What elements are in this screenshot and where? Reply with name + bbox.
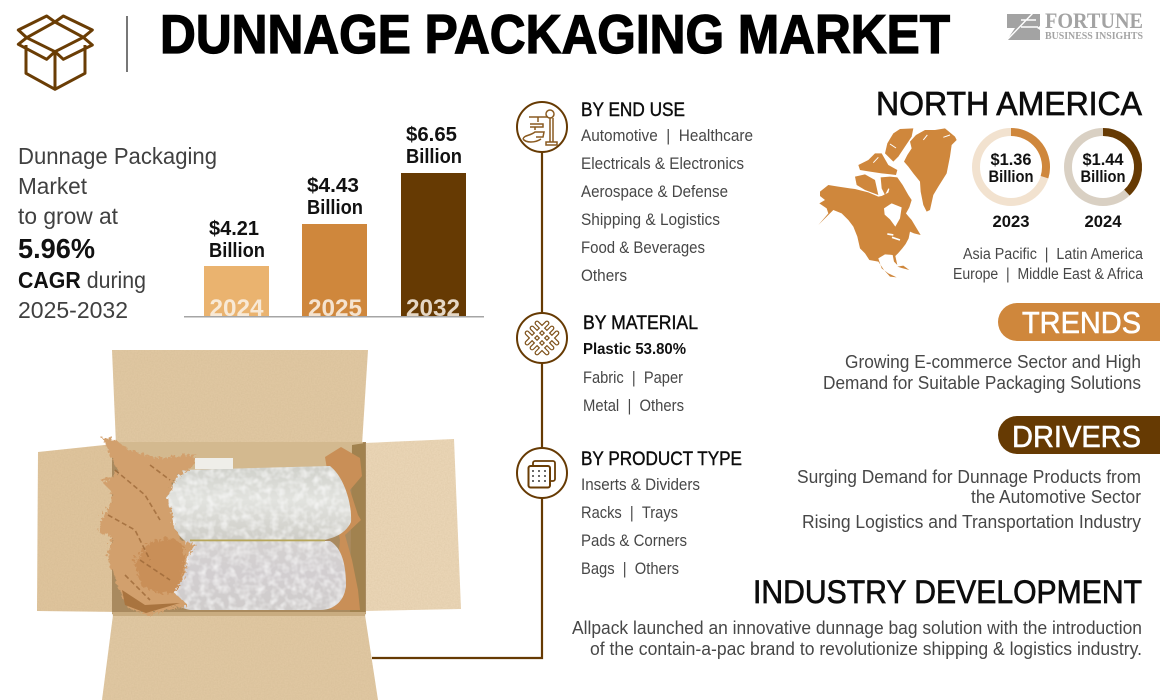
- bar 2024: $4.21: [209, 218, 259, 240]
- icon: product type: [517, 448, 567, 498]
- donut: 2023: $1.36: [990, 150, 1032, 169]
- donut: 2024: 2024: [1084, 212, 1122, 231]
- bar 2025: 2025: [308, 295, 362, 322]
- donut: 2023: 2023: [992, 212, 1030, 231]
- pill: drivers: DRIVERS: [1012, 419, 1141, 454]
- bar chart: market size: [184, 124, 484, 322]
- bar 2024: [204, 218, 269, 322]
- CAGR text block: CAGR during: [18, 267, 146, 293]
- segment: by material: Fabric | Paper: [583, 369, 683, 387]
- heading: industry development: INDUSTRY DEVELOPMENT: [753, 574, 1142, 610]
- donut: 2023: Billion: [988, 167, 1034, 186]
- segment: by product type: Racks | Trays: [581, 504, 678, 522]
- segment: by product type: Pads & Corners: [581, 532, 687, 550]
- icon: open cardboard box: [18, 16, 92, 89]
- heading: north america: NORTH AMERICA: [876, 85, 1142, 122]
- CAGR text block: 2025-2032: [18, 297, 128, 323]
- segment: by end use: Shipping & Logistics: [581, 211, 720, 229]
- icon: end use: [517, 102, 567, 152]
- segment: by product type: [581, 449, 742, 578]
- segment: by product type: BY PRODUCT TYPE: [581, 449, 742, 470]
- other regions: Asia Pacific | Latin America: [963, 246, 1143, 263]
- logo: Fortune Business Insights: [1006, 8, 1143, 42]
- bar 2032: $6.65: [406, 124, 457, 146]
- segment: by end use: Food & Beverages: [581, 239, 705, 257]
- bar 2024: 2024: [210, 295, 264, 322]
- CAGR text block: to grow at: [18, 203, 119, 229]
- bubble wrap top: [165, 466, 351, 541]
- CAGR text block: [18, 143, 217, 323]
- bubble wrap bottom: [171, 541, 346, 610]
- title: DUNNAGE PACKAGING MARKET: [160, 3, 950, 65]
- segment: by end use: BY END USE: [581, 100, 685, 121]
- text: trends: Growing E-commerce Sector and High: [845, 352, 1141, 372]
- CAGR text block: Dunnage Packaging: [18, 143, 217, 169]
- segment: by end use: Automotive | Healthcare: [581, 127, 753, 145]
- map: north america: [818, 128, 957, 277]
- segment: by product type: Bags | Others: [581, 560, 679, 578]
- text: drivers: [797, 467, 1141, 532]
- bar 2025: [302, 175, 367, 322]
- text: drivers: the Automotive Sector: [971, 487, 1141, 507]
- text: industry development: [572, 618, 1142, 659]
- segment: by material: BY MATERIAL: [583, 313, 698, 334]
- bar 2032: [401, 124, 466, 322]
- kraft paper left: [97, 436, 195, 613]
- donut: 2024: $1.44: [1082, 150, 1124, 169]
- segment: by material: Plastic 53.80%: [583, 341, 686, 358]
- kraft paper creases: [108, 465, 170, 600]
- other regions: [953, 246, 1143, 283]
- donut: 2024: Billion: [1080, 167, 1126, 186]
- text: industry development: of the contain-a-pac brand to revolutionize shipping & logistics industry.: [590, 639, 1142, 659]
- CAGR text block: Market: [18, 173, 88, 199]
- bar 2032: Billion: [406, 146, 462, 168]
- text: trends: Demand for Suitable Packaging Solutions: [823, 373, 1141, 393]
- bar 2025: $4.43: [307, 175, 359, 197]
- other regions: Europe | Middle East & Africa: [953, 266, 1143, 283]
- segment: by end use: Others: [581, 267, 627, 285]
- text: trends: [823, 352, 1141, 393]
- pill: trends: TRENDS: [1022, 305, 1141, 340]
- segment: by end use: Electricals & Electronics: [581, 155, 744, 173]
- segment: by end use: [581, 100, 753, 285]
- photo: open box with dunnage: [37, 350, 461, 700]
- connector line: [372, 150, 542, 658]
- segment: by end use: Aerospace & Defense: [581, 183, 728, 201]
- text: drivers: Rising Logistics and Transportation Industry: [802, 512, 1141, 532]
- CAGR text block: 5.96%: [18, 233, 95, 264]
- icon: material weave: [517, 313, 567, 363]
- segment: by material: [583, 313, 698, 415]
- header divider: [126, 16, 128, 72]
- logo: Fortune Business Insights: FORTUNE: [1045, 8, 1143, 33]
- bar 2032: 2032: [406, 295, 460, 322]
- donut: 2024: [1068, 132, 1138, 231]
- bar 2025: Billion: [307, 197, 363, 219]
- text: drivers: Surging Demand for Dunnage Products from: [797, 467, 1141, 487]
- kraft paper right: [315, 447, 362, 610]
- segment: by material: Metal | Others: [583, 397, 684, 415]
- logo: Fortune Business Insights: BUSINESS INSIGHTS: [1045, 31, 1143, 42]
- segment: by product type: Inserts & Dividers: [581, 476, 700, 494]
- bar 2024: Billion: [209, 240, 265, 262]
- donut: 2023: [976, 132, 1046, 231]
- text: industry development: Allpack launched an innovative dunnage bag solution with the introduction: [572, 618, 1142, 638]
